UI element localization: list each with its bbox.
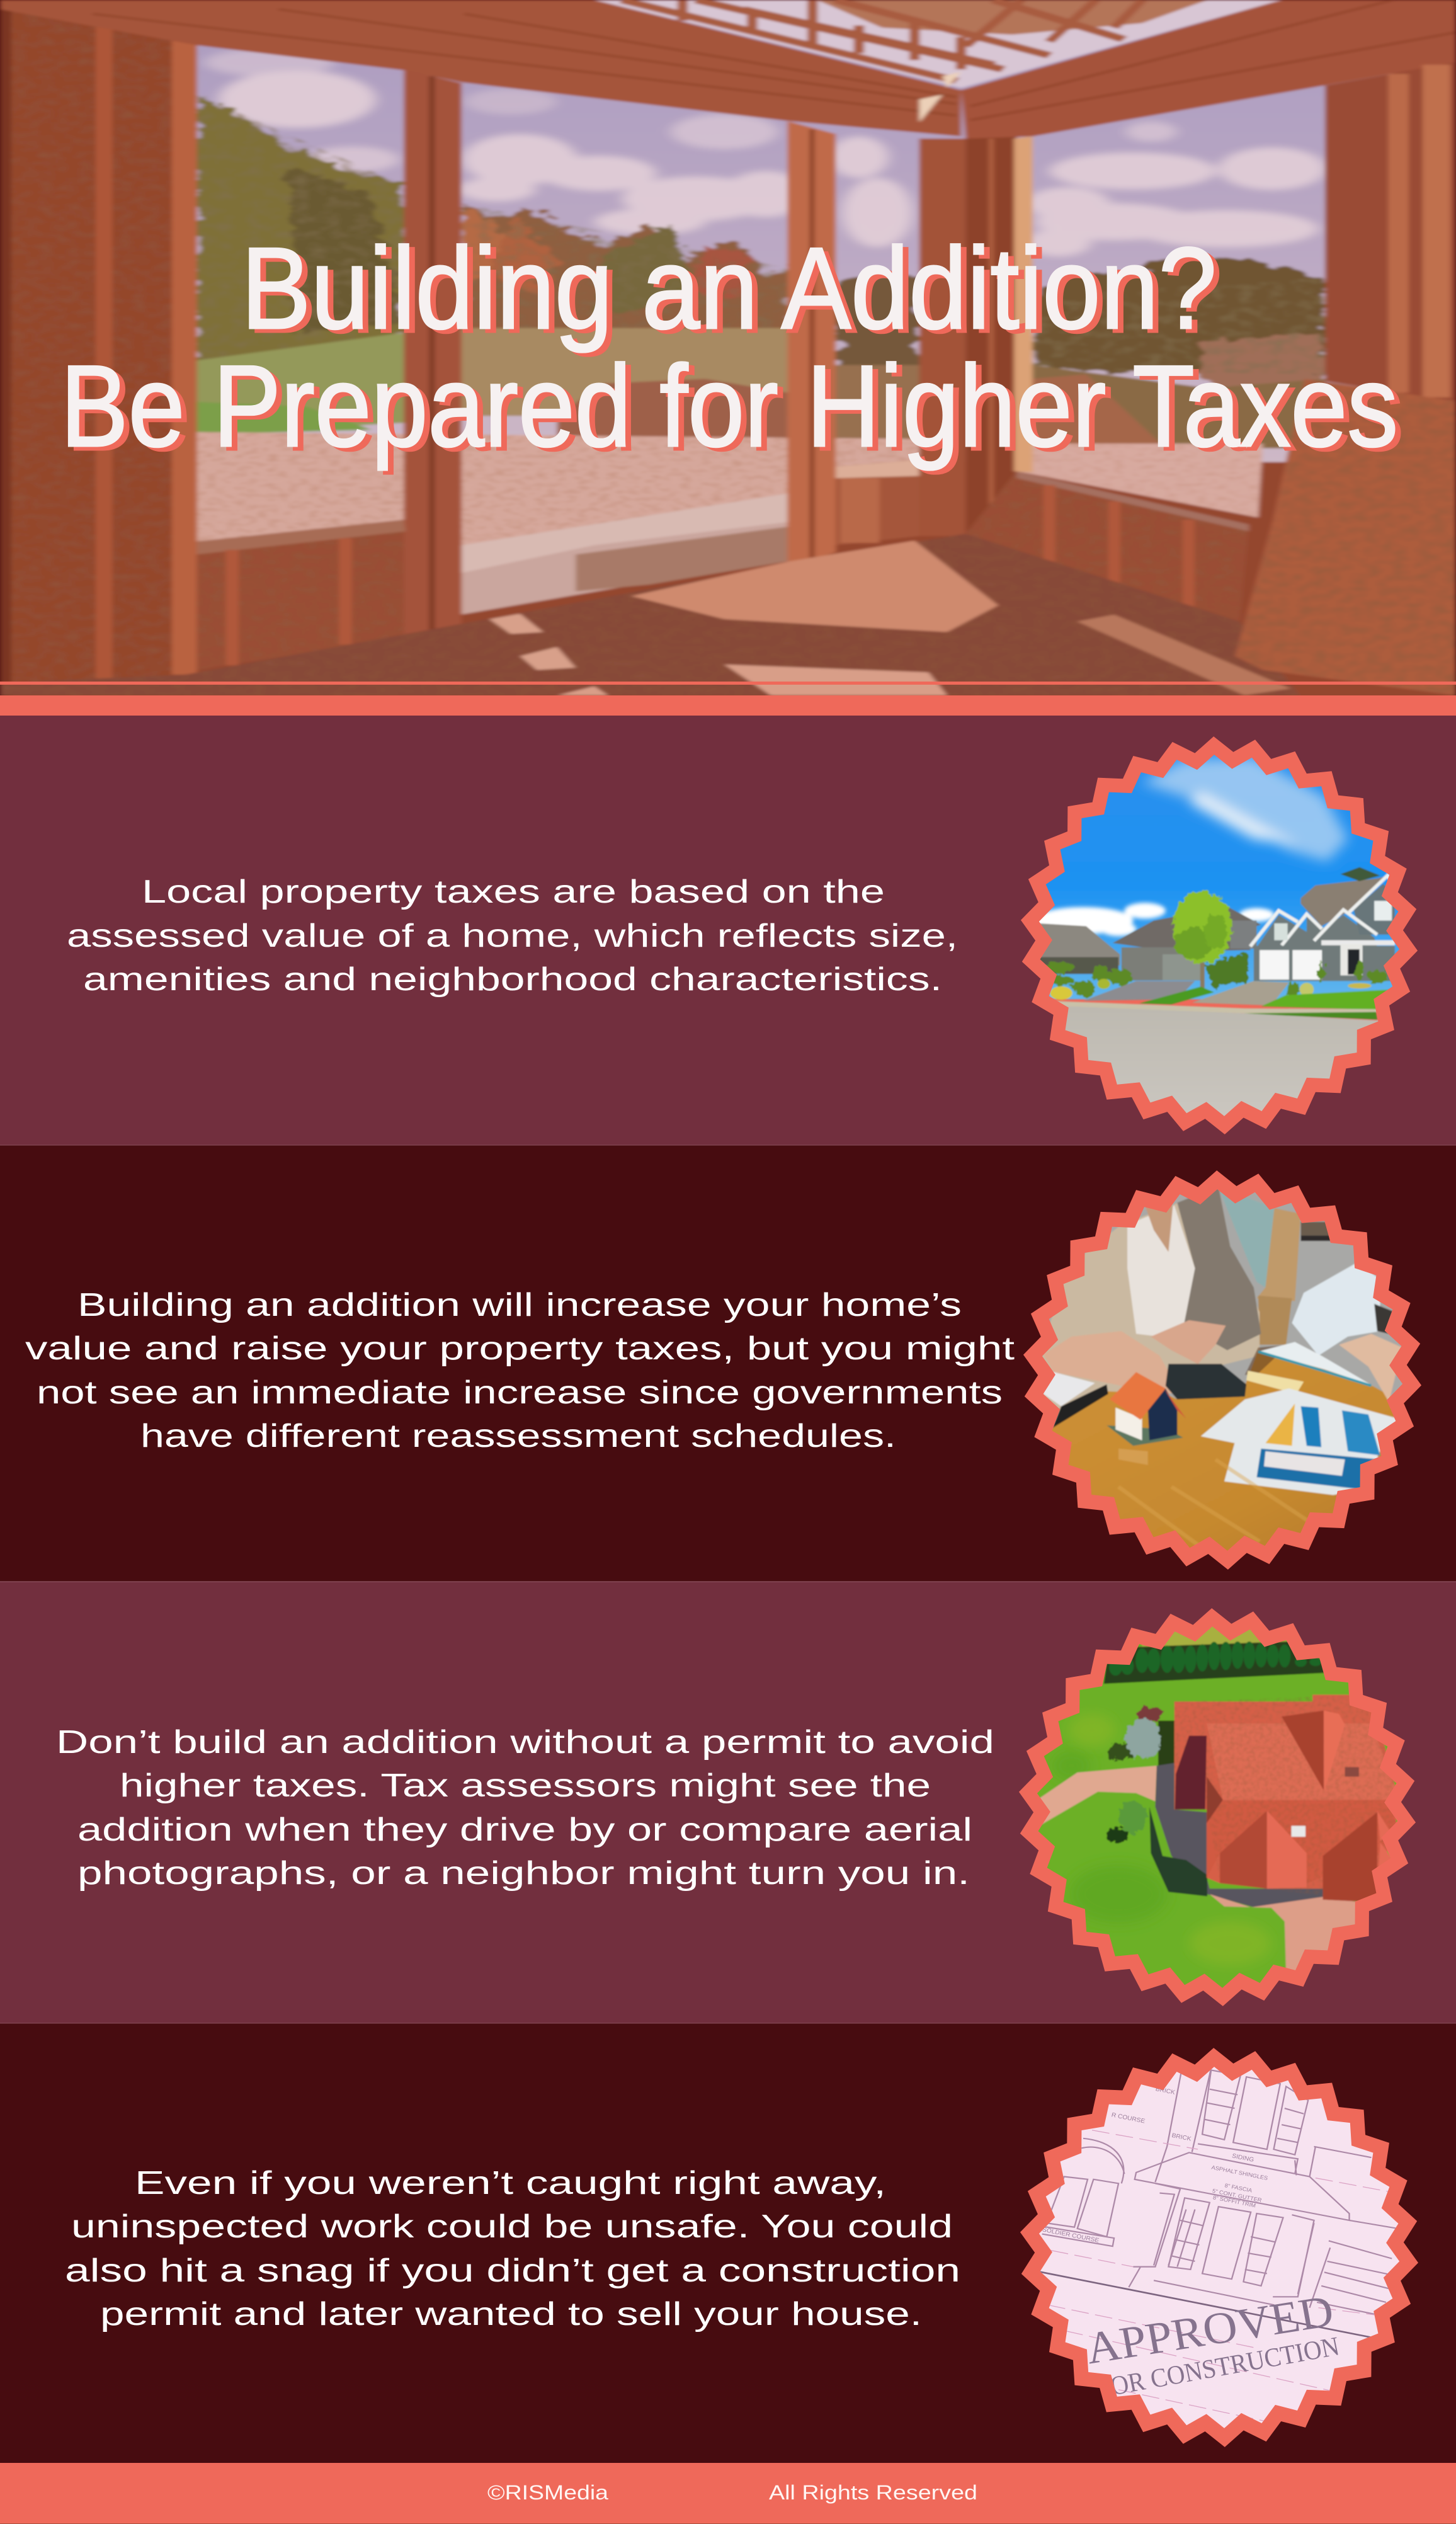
thin coral rule across hero: [0, 682, 1456, 685]
icon: starburst badge with suburban houses: [1021, 736, 1418, 1134]
title: Building an Addition?: [247, 227, 1222, 357]
text block: permit warning: addition when they drive by or compare aerial: [77, 1812, 972, 1848]
text block: assessed value: assessed value of a home, which reflects size,: [67, 918, 958, 954]
text block: uninspected work: [65, 2165, 960, 2333]
text block: permit warning: photographs, or a neighbor might turn you in.: [77, 1855, 970, 1892]
text block: reassessment schedules: [25, 1287, 1015, 1454]
icon: starburst badge with approved blueprint: BRICK: [1155, 2086, 1176, 2096]
text block: permit warning: Don’t build an addition without a permit to avoid: [56, 1724, 994, 1761]
footer bar: All Rights Reserved: [769, 2481, 977, 2504]
text block: uninspected work: uninspected work could be unsafe. You could: [71, 2208, 953, 2245]
icon: starburst badge with calculator and model house: [1023, 1170, 1421, 1570]
text block: reassessment schedules: have different reassessment schedules.: [140, 1418, 896, 1454]
icon: starburst badge with approved blueprint: OR CONSTRUCTION: [1108, 2331, 1342, 2401]
footer bar: [0, 2463, 1456, 2523]
icon: starburst badge with approved blueprint: 8" SOFFIT TRIM: [1212, 2195, 1256, 2208]
icon: starburst badge with approved blueprint: R COURSE: [1111, 2112, 1146, 2125]
text block: reassessment schedules: value and raise your property taxes, but you might: [25, 1330, 1015, 1367]
icon: starburst badge with approved blueprint: ASPHALT SHINGLES: [1211, 2164, 1268, 2181]
text block: reassessment schedules: not see an immediate increase since governments: [37, 1374, 1003, 1411]
panel: reassessment schedules: [25, 1170, 1421, 1570]
text block: assessed value: amenities and neighborhood characteristics.: [83, 961, 942, 998]
footer bar: ©RISMedia: [487, 2481, 608, 2504]
text block: permit warning: higher taxes. Tax assessors might see the: [120, 1767, 931, 1804]
coral band under hero: [0, 695, 1456, 716]
icon: starburst badge with approved blueprint: BRICK: [1171, 2132, 1192, 2143]
panel: permit warning: [0, 1582, 1456, 2023]
text block: reassessment schedules: Building an addition will increase your home’s: [77, 1287, 962, 1323]
title: [60, 223, 1404, 474]
panel: uninspected work: [67, 2048, 1418, 2447]
icon: starburst badge with approved blueprint: 5" CONT. GUTTER: [1212, 2188, 1263, 2203]
icon: starburst badge with approved blueprint: 8" FASCIA: [1224, 2182, 1253, 2193]
icon: starburst badge with approved blueprint: APPROVED: [1082, 2286, 1338, 2374]
icon: starburst badge with aerial view of house: [1019, 1608, 1416, 2006]
panel: assessed value: [0, 716, 1456, 1159]
text block: uninspected work: also hit a snag if you didn’t get a construction: [65, 2253, 960, 2289]
icon: starburst badge with approved blueprint: [1020, 2048, 1418, 2447]
text block: assessed value: [67, 874, 958, 998]
text block: uninspected work: Even if you weren’t caught right away,: [135, 2165, 886, 2201]
icon: starburst badge with approved blueprint: SOLDIER COURSE: [1042, 2227, 1100, 2244]
text block: permit warning: [56, 1724, 994, 1892]
text block: uninspected work: permit and later wanted to sell your house.: [100, 2296, 922, 2333]
icon: starburst badge with approved blueprint: SIDING: [1231, 2153, 1254, 2164]
text block: assessed value: Local property taxes are based on the: [142, 874, 885, 910]
hero photo: house framing under construction: [0, 0, 1456, 724]
title: Building an Addition?: [241, 223, 1217, 353]
